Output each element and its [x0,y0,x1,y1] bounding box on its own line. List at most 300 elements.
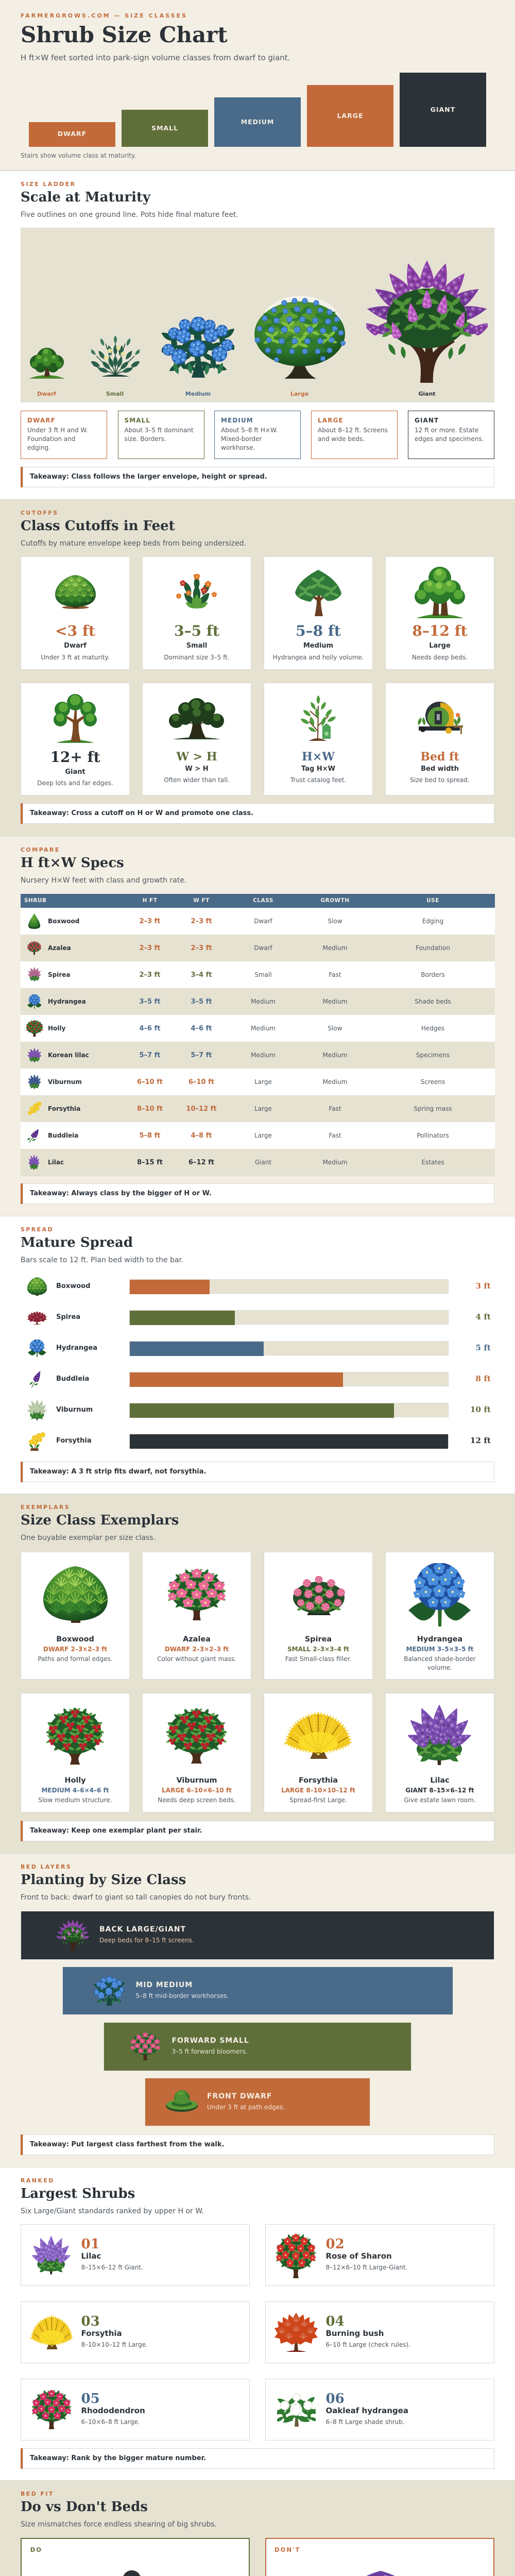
row: spirea: 2–3 ft [139,971,161,979]
icon: giant tree [54,694,97,743]
bar row: spirea 4 ft: 4 ft [475,1312,491,1321]
card: 5-8 ft [264,556,373,670]
layer: front: Under 3 ft at path edges. [207,2104,285,2111]
icon: lilac [28,1155,40,1170]
icon: tape measure [418,702,463,734]
icon: holly [46,1708,104,1765]
card: medium: About 5–8 ft H×W. [221,427,278,434]
row: lilac: Estates [421,1158,444,1165]
card: large: About 8–12 ft. Screens [318,427,388,434]
eyebrow: SIZE LADDER [21,181,76,188]
row: buddleia: 5–8 ft [139,1131,161,1140]
icon: viburnum [166,1708,227,1764]
card: bed ft: Bed ft [420,750,459,764]
eyebrow: COMPARE [21,846,60,853]
row: spirea [21,961,495,988]
row: spirea: Small [254,971,272,978]
layer: front: FRONT DWARF [207,2092,272,2100]
stair: large: LARGE [337,112,364,120]
row: viburnum: Large [254,1078,272,1085]
row: lilac: 6–12 ft [188,1158,214,1166]
layer: back: BACK LARGE/GIANT [99,1925,186,1934]
layer: forward: FORWARD SMALL [172,2037,249,2045]
layer: forward [104,2022,411,2071]
row: forsythia: Fast [329,1105,341,1112]
icon: spirea [28,967,41,981]
bar row: viburnum 10 ft: Viburnum [56,1406,93,1414]
row: azalea: Dwarf [254,944,272,951]
layer: front [145,2078,370,2126]
card: forsythia: Spread-first Large. [289,1797,347,1804]
card: hydrangea [385,1552,494,1680]
icon: forsythia [29,1432,45,1451]
card: azalea: Azalea [183,1635,211,1643]
icon: spirea [293,1576,345,1615]
icon: forsythia [30,2315,73,2349]
icon: large shrub [254,296,346,379]
row: holly [21,1015,495,1042]
row: viburnum: Screens [421,1078,445,1085]
card: 3-5 ft: Small [186,642,207,650]
card: boxwood: Paths and formal edges. [38,1655,113,1663]
takeaway: Takeaway: Put largest class farthest from the walk. [30,2140,224,2148]
rank card: 05 rhododendron: 6–10×6–8 ft Large. [81,2418,140,2426]
card: W > H: W > H [185,765,209,773]
takeaway: Takeaway: Always class by the bigger of H or W. [30,1190,212,1197]
table header: SHRUB [24,897,46,904]
card: 5-8 ft: Hydrangea and holly volume. [273,654,364,661]
icon: holly [26,1020,43,1037]
row: azalea: 2–3 ft [191,944,212,952]
panel: cutoffs [0,499,515,836]
rank card: 03 forsythia [21,2301,250,2363]
subhead: Bars scale to 12 ft. Plan bed width to the bar. [21,1256,183,1264]
label: giant: Giant [418,391,436,397]
card: spirea: SMALL 2–3×3–4 ft [287,1646,349,1653]
dont card: giant in strip: DON'T [274,2546,300,2553]
subhead: Cutoffs by mature envelope keep beds from being undersized. [21,539,246,548]
rank card: 04 burning bush: Burning bush [325,2329,384,2338]
row: holly: Hedges [421,1024,444,1031]
eyebrow: CUTOFFS [21,510,59,516]
card: small [117,411,204,459]
card: giant: edges and specimens. [415,435,484,443]
eyebrow: BED FIT [21,2490,54,2497]
row: korean lilac: Medium [322,1051,347,1058]
heading: H ft×W Specs [21,855,124,871]
table header: W FT [193,897,210,904]
panel: hero header [0,0,515,171]
bar row: spirea 4 ft [27,1310,491,1325]
card: 12+ ft: Giant [65,768,85,776]
card: HxW: Tag H×W [301,765,335,773]
panel: compare [0,836,515,1216]
icon: medium shrub [162,317,234,378]
icon: small shrub [91,335,140,377]
layer: forward: 3–5 ft forward bloomers. [172,2048,248,2055]
card: under 3 ft: <3 ft [55,622,95,639]
card: azalea: DWARF 2–3×2–3 ft [165,1646,229,1653]
eyebrow: BED LAYERS [21,1863,72,1870]
bar row: hydrangea 5 ft: 5 ft [475,1343,491,1352]
row: hydrangea: Shade beds [415,997,451,1005]
card: giant: GIANT [415,417,439,424]
row: spirea: Borders [421,971,445,978]
row: holly: Slow [328,1024,342,1031]
card: large [311,411,398,459]
row: hydrangea: 3–5 ft [191,997,212,1006]
row: boxwood: 2–3 ft [139,917,161,925]
label: small: Small [106,391,124,397]
card: spirea: Fast Small-class filler. [285,1655,351,1663]
eyebrow: EXEMPLARS [21,1504,70,1511]
card: medium [214,411,301,459]
card: 8-12 ft: Needs deep beds. [412,654,468,661]
card: medium: MEDIUM [221,417,253,424]
card: hydrangea: MEDIUM 3–5×3–5 ft [406,1646,474,1653]
rank card: 01 lilac: 8–15×6–12 ft Giant. [81,2264,143,2271]
card: spirea: Spirea [305,1635,332,1643]
takeaway: Takeaway: Class follows the larger envelope, height or spread. [30,473,267,481]
card: 12+ ft: Deep lots and far edges. [37,779,113,787]
heading: Mature Spread [21,1235,133,1250]
row: buddleia: Pollinators [417,1131,449,1139]
card: azalea: Color without giant mass. [157,1655,236,1663]
row: boxwood: 2–3 ft [191,917,212,925]
eyebrow: RANKED [21,2177,55,2184]
card: large: and wide beds. [318,435,365,443]
card: medium: Mixed-border [221,435,262,443]
icon: azalea shrub [130,2032,160,2060]
icon: burning bush [274,2313,318,2352]
row: buddleia: Large [254,1131,272,1139]
rank card: 01 lilac [21,2224,250,2286]
icon: oakleaf hydrangea [277,2393,316,2427]
stair: giant: GIANT [431,106,455,113]
card: lilac [385,1693,494,1812]
layer: back [21,1911,494,1960]
stair: medium: MEDIUM [241,118,274,126]
icon: lilac [408,1705,471,1765]
card: hydrangea: Balanced shade-border [404,1655,476,1663]
icon: viburnum [27,1399,47,1420]
card: lilac: GIANT 8–15×6–12 ft [405,1787,474,1794]
stair chart: volume classes [29,73,486,147]
takeaway [21,2448,494,2469]
rank card: 06 oakleaf hydrangea: 6–8 ft Large shade shrub. [325,2418,405,2426]
heading: Largest Shrubs [21,2186,135,2201]
rank card: 01 lilac: 01 [81,2236,100,2251]
card: bed ft: Size bed to spread. [410,776,470,784]
icon: rose of sharon [276,2234,316,2278]
row: forsythia: 10–12 ft [186,1105,217,1113]
icon: buddleia [27,1129,39,1143]
row: boxwood [21,908,495,935]
card: hydrangea: volume. [427,1664,452,1671]
stair: dwarf [29,122,115,147]
rank card: 06 oakleaf hydrangea [265,2379,494,2441]
card: dwarf: Foundation and [27,435,75,443]
bar row: viburnum 10 ft [27,1399,491,1420]
heading: Size Class Exemplars [21,1513,179,1528]
table: shrub specs [21,894,495,1176]
bar row: hydrangea 5 ft [28,1340,491,1357]
panel: ranked [0,2167,515,2480]
row: spirea: 3–4 ft [191,971,212,979]
card: forsythia: Forsythia [299,1776,338,1785]
illustration: tape measure over planted bed [102,2570,168,2576]
dont card: giant in strip [265,2538,494,2576]
row: boxwood: Boxwood [48,917,79,924]
rank card: 05 rhododendron: 05 [81,2391,100,2406]
rank card: 02 rose of sharon: Rose of Sharon [325,2251,392,2261]
card: 8-12 ft [385,556,494,670]
card: forsythia [264,1693,373,1812]
card: dwarf: DWARF [27,417,56,424]
icon: large tree [415,567,465,618]
row: korean lilac: Korean lilac [48,1051,89,1058]
row: korean lilac: Specimens [416,1051,450,1058]
bar row: boxwood 3 ft: Boxwood [56,1282,90,1290]
row: holly: Holly [48,1024,65,1031]
icon: azalea [168,1569,226,1620]
card: HxW [264,683,373,795]
row: korean lilac: 5–7 ft [191,1051,212,1059]
takeaway [21,1183,494,1204]
card: forsythia: LARGE 8–10×10–12 ft [281,1787,355,1794]
caption: Stairs show volume class at maturity. [21,152,136,159]
row: forsythia: Forsythia [48,1105,80,1112]
card: holly: Holly [64,1776,86,1785]
row: hydrangea: Medium [251,997,276,1005]
label: medium: Medium [185,391,211,397]
row: lilac [21,1149,495,1176]
takeaway [21,467,494,487]
row: viburnum [21,1069,495,1095]
do card: match bed [21,2538,250,2576]
rank card: 02 rose of sharon: 8–12×6–10 ft Large-Giant. [325,2264,407,2271]
chart: shrub scale on a ground line [21,228,494,402]
card: bed ft [385,683,494,795]
card: 12+ ft [21,683,130,795]
subhead: Five outlines on one ground line. Pots hide final mature feet. [21,211,238,219]
card: holly [21,1693,130,1812]
row: boxwood: Dwarf [254,917,272,924]
heading: Class Cutoffs in Feet [21,518,175,534]
icon: buddleia [30,1371,40,1388]
card: boxwood [21,1552,130,1680]
icon: lilac shrub [57,1920,89,1951]
icon: azalea [27,941,41,955]
rank card: 02 rose of sharon [265,2224,494,2286]
bar row: viburnum 10 ft: 10 ft [470,1405,491,1414]
card: 5-8 ft: 5–8 ft [296,622,341,639]
card: holly: MEDIUM 4–6×4–6 ft [41,1787,109,1794]
takeaway [21,1461,494,1482]
eyebrow: FARMERGROWS.COM — SIZE CLASSES [21,12,187,19]
takeaway [21,803,494,824]
table header: CLASS [253,897,273,904]
layer: mid [62,1967,453,2015]
icon: boxwood [43,1566,108,1623]
row: hydrangea [21,988,495,1015]
table header [21,894,495,908]
heading: Planting by Size Class [21,1872,186,1888]
card: viburnum: Needs deep screen beds. [158,1797,236,1804]
icon: giant shrub [366,261,488,383]
card: 8-12 ft: Large [429,642,451,650]
stair: large [307,85,393,147]
card: under 3 ft: Under 3 ft at maturity. [41,654,110,661]
takeaway: Takeaway: Rank by the bigger mature number. [30,2454,206,2462]
rank card: 03 forsythia: 8–10×10–12 ft Large. [81,2341,148,2348]
icon: korean lilac [27,1048,42,1062]
panel: exemplars [0,1494,515,1853]
row: buddleia: Fast [329,1131,341,1139]
row: korean lilac: 5–7 ft [139,1051,161,1059]
icon: boxwood [27,1277,47,1296]
rank card: 01 lilac: Lilac [81,2251,101,2261]
row: forsythia: Spring mass [414,1105,452,1112]
bar row: boxwood 3 ft [27,1277,491,1296]
takeaway: Takeaway: Cross a cutoff on H or W and promote one class. [30,809,253,817]
card: large: LARGE [318,417,344,424]
heading: Scale at Maturity [21,190,150,205]
takeaway [21,2134,494,2155]
rank card: 03 forsythia: Forsythia [81,2329,122,2338]
eyebrow: SPREAD [21,1226,54,1233]
row: hydrangea: 3–5 ft [139,997,161,1006]
rank card: 06 oakleaf hydrangea: 06 [325,2391,345,2406]
row: lilac: 8–15 ft [137,1158,163,1166]
card: azalea [142,1552,251,1680]
bar row: buddleia 8 ft [30,1371,491,1388]
card: 5-8 ft: Medium [303,642,333,650]
card: under 3 ft [21,556,130,670]
icon: hydrangea [28,1340,46,1357]
subhead: One buyable exemplar per size class. [21,1534,156,1542]
row: forsythia [21,1095,495,1122]
icon: spirea [27,1311,47,1325]
row: buddleia: Buddleia [48,1131,78,1139]
icon: dwarf topiary [166,2090,198,2112]
row: lilac: Medium [322,1158,347,1165]
rank card: 06 oakleaf hydrangea: Oakleaf hydrangea [325,2406,408,2415]
card: 3-5 ft: Dominant size 3–5 ft. [164,654,230,661]
card: dwarf: edging. [27,444,50,451]
card: small: SMALL [125,417,150,424]
title: Shrub Size Chart [21,22,228,47]
stair: small [122,110,208,147]
panel: bed fit [0,2480,515,2576]
card: boxwood: DWARF 2–3×2–3 ft [43,1646,107,1653]
rank card: 02 rose of sharon: 02 [325,2236,345,2251]
row: spirea: Fast [329,971,341,978]
illustration: oversized purple shrub [347,2571,415,2576]
card: viburnum: Viburnum [177,1776,217,1785]
takeaway: Takeaway: A 3 ft strip fits dwarf, not forsythia. [30,1467,206,1476]
table header: USE [426,897,439,904]
rank card: 05 rhododendron: Rhododendron [81,2406,145,2415]
stair: dwarf: DWARF [58,130,87,138]
subhead: Size mismatches force endless shearing of big shrubs. [21,2520,217,2529]
table header: GROWTH [320,897,350,904]
row: viburnum: Viburnum [48,1078,82,1085]
bar row: boxwood 3 ft: 3 ft [475,1281,491,1291]
icon: dwarf shrub [29,348,65,379]
icon: medium tree [295,570,341,616]
row: holly: 4–6 ft [139,1024,161,1032]
card: 8-12 ft: 8–12 ft [412,622,468,639]
layer: back: Deep beds for 8–15 ft screens. [99,1937,194,1944]
row: azalea: 2–3 ft [139,944,161,952]
row: hydrangea: Medium [322,997,347,1005]
takeaway: Takeaway: Keep one exemplar plant per stair. [30,1827,202,1835]
panel: bed layers [0,1853,515,2167]
icon: wide tree [169,698,224,739]
card: 3-5 ft [142,556,251,670]
card: giant [408,411,494,459]
row: korean lilac: Medium [251,1051,276,1058]
card: HxW: H×W [302,750,335,764]
stair: small: SMALL [151,124,178,132]
card: hydrangea: Hydrangea [417,1635,462,1643]
subhead: Nursery H×W feet with class and growth rate. [21,876,186,885]
card: viburnum: LARGE 6–10×6–10 ft [162,1787,232,1794]
panel: spread [0,1216,515,1494]
icon: tagged sapling [301,696,336,741]
layer: mid: MID MEDIUM [136,1981,193,1989]
bar row: forsythia 12 ft: Forsythia [56,1437,92,1445]
row: holly: Medium [251,1024,276,1031]
row: lilac: Giant [255,1158,271,1165]
icon: viburnum [28,1074,41,1089]
row: lilac: Lilac [48,1158,64,1165]
row: forsythia: 8–10 ft [137,1105,163,1113]
card: bed ft: Bed width [421,765,459,773]
bar row: hydrangea 5 ft: Hydrangea [56,1344,97,1352]
row: viburnum: 6–10 ft [137,1078,163,1086]
icon: forsythia [28,1101,42,1115]
subtitle: H ft×W feet sorted into park-sign volume classes from dwarf to giant. [21,53,290,62]
subhead: Six Large/Giant standards ranked by upper H or W. [21,2207,204,2215]
row: viburnum: 6–10 ft [188,1078,214,1086]
rank card: 04 burning bush [265,2301,494,2363]
subhead: Front to back: dwarf to giant so tall canopies do not bury fronts. [21,1893,251,1902]
card: W > H: Often wider than tall. [164,776,230,784]
stair: giant [400,73,486,147]
card: holly: Slow medium structure. [38,1797,112,1804]
takeaway [21,1821,494,1841]
icon: hydrangea shrub [94,1976,125,2006]
bar row: buddleia 8 ft: 8 ft [475,1374,491,1383]
bar row: forsythia 12 ft [29,1432,491,1451]
row: azalea: Medium [322,944,347,951]
label: large: Large [290,391,308,397]
card: lilac: Give estate lawn room. [404,1797,476,1804]
card: under 3 ft: Dwarf [64,642,87,650]
panel: size ladder [0,171,515,499]
row: azalea: Azalea [48,944,71,951]
rank card: 05 rhododendron [21,2379,250,2441]
card: 12+ ft: 12+ ft [50,749,100,766]
row: korean lilac [21,1042,495,1069]
rank card: 04 burning bush: 04 [325,2313,345,2329]
rank card: 04 burning bush: 6–10 ft Large (check rules). [325,2341,410,2348]
row: azalea [21,935,495,961]
card: spirea [264,1552,373,1680]
layer: mid: 5–8 ft mid-border workhorses. [136,1992,229,1999]
